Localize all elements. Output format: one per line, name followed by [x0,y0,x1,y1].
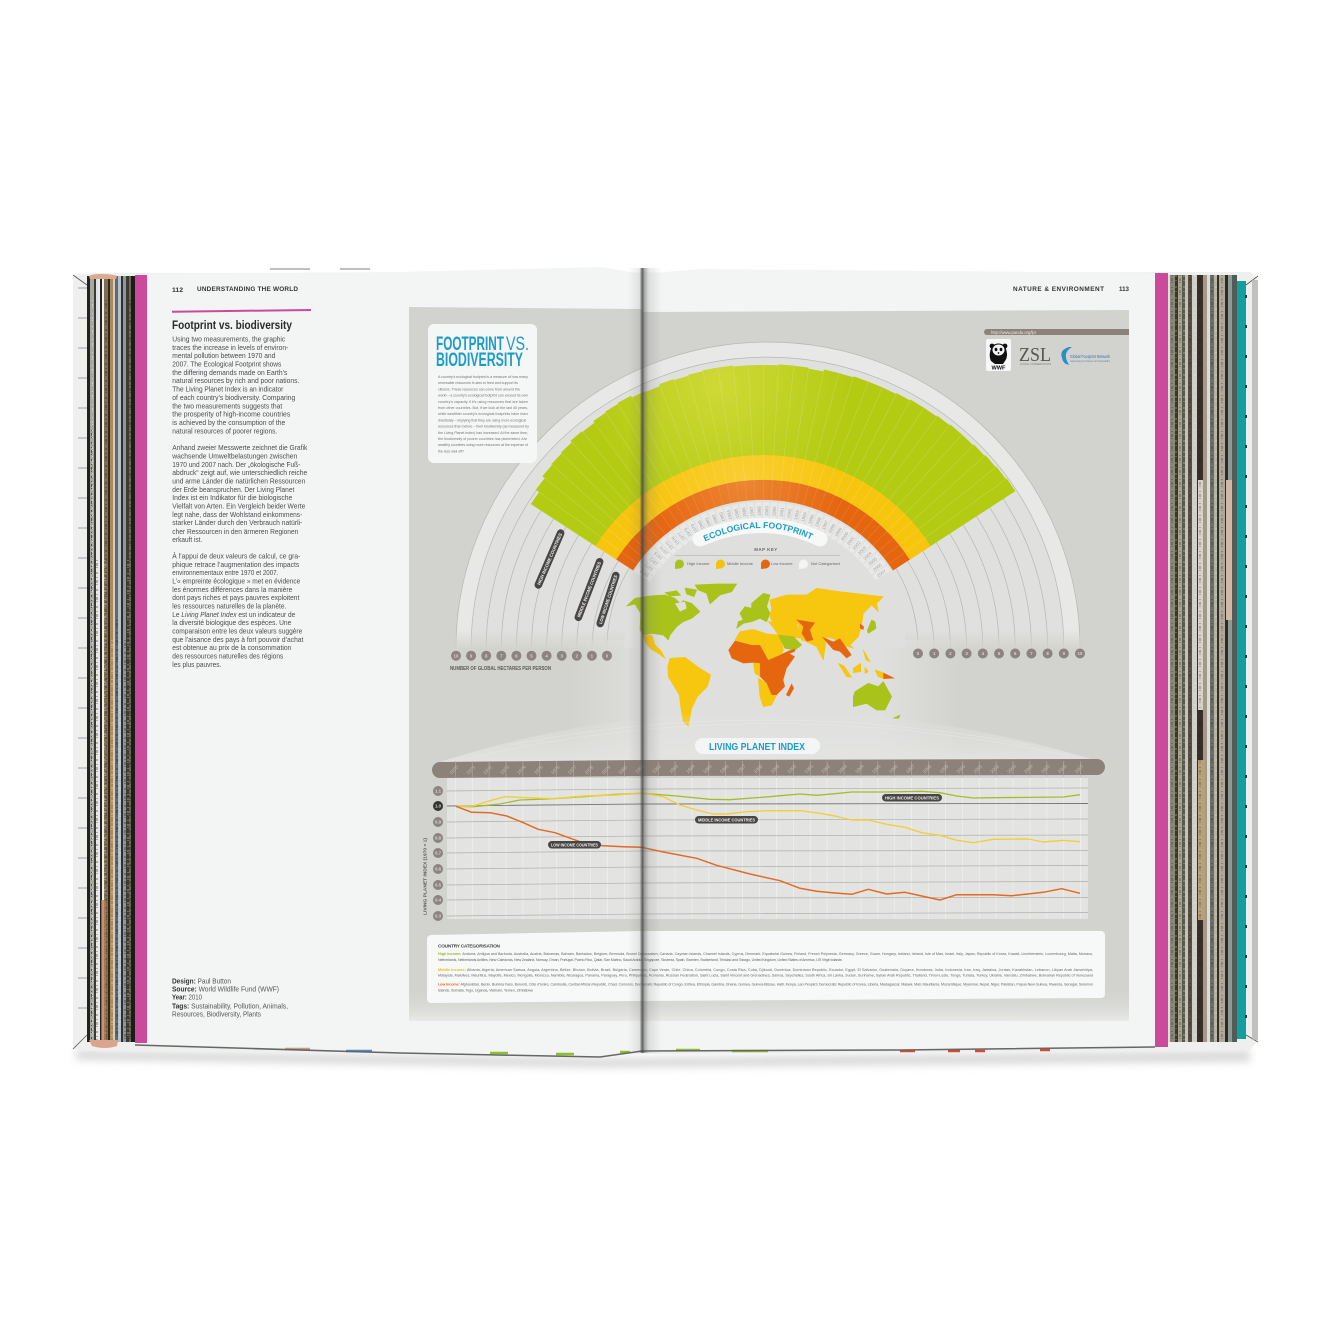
English text block: Using two measurements, the graphic [172,334,286,344]
left page running head: UNDERSTANDING THE WORLD [197,286,298,293]
year bar: 1998 [922,763,933,774]
year ring: 2007 [876,568,888,578]
label: middle income line: MIDDLE INCOME COUNTRIES [698,818,755,822]
heading: living planet index: LIVING PLANET INDEX [709,742,805,753]
year bar: 1984 [685,763,696,774]
left page running head [172,286,298,294]
year bar: 1974 [516,764,527,775]
main title: FOOTPRINT [436,334,504,355]
intro text: world – a country’s ecological footprint can exceed its own [438,394,528,398]
scale dots left [451,651,612,661]
logo: Global Footprint Network: Global Footprint Network [1070,354,1111,359]
year bar: 1971 [465,764,477,775]
year ring: 1974 [658,545,669,556]
year ring: 2004 [862,550,873,561]
scale dots left: 6 [515,653,518,658]
year ring: 1976 [670,535,680,546]
French text block [172,552,303,669]
year bar: 2007 [1074,763,1085,774]
year ring: 1983 [718,511,726,522]
label: low income line: LOW INCOME COUNTRIES [551,842,598,848]
year bar: 1972 [482,764,493,775]
year ring: 1981 [704,516,712,527]
logo: Global Footprint Network: Advancing the Science of Sustainability [1070,359,1111,363]
panel heading: COUNTRY CATEGORISATION [438,944,501,950]
key: low income: Low Income [771,561,793,566]
English text block: of each country’s biodiversity. Comparing [172,393,295,402]
scale dots right: 3 [965,651,968,656]
chart: living planet index [422,763,1097,921]
intro text: while wealthier country’s ecological footprints have risen [438,412,528,416]
label: middle income countries: MIDDLE INCOME COUNTRIES [576,561,602,618]
middle income list: Malaysia, Maldives, Mauritius, Mayotte, Mexico, Mongolia, Morocco, Namibia, Nicaragua, Panama, Paraguay, Peru, Philippines, Romania, Russian Federation, Saint Lucia, Saint Vincent and Grenadines, Samoa, Seychelles, South Africa, Sri Lanka, Sudan, Suriname, Syrian Arab Republic, Thailand, Timor-Leste, Tonga, Tunisia, Turkey, Ukraine, Vanuatu, Zimbabwe, Bolivarian Republic of Venezuela [438,974,1094,978]
axis dots [433,786,443,921]
intro text: the biodiversity of poorer countries has plummeted. Are [438,437,527,441]
low income band [625,490,901,565]
map: middle income regions [643,588,883,727]
axis dots: 0.6 [435,867,442,872]
scale caption: NUMBER OF GLOBAL HECTARES PER PERSON [450,666,551,672]
French text block: environnementaux entre 1970 et 2007. [172,568,278,577]
French text block: L’« empreinte écologique » met en évidence [172,576,300,586]
pink title rule [172,310,311,312]
year ring: 1992 [786,508,793,519]
English text block [172,334,299,436]
high income list [438,952,1093,962]
credits block: Resources, Biodiversity, Plants [172,1012,262,1018]
year bar: 1993 [837,763,848,774]
scale dots left: 0 [606,653,609,658]
axis title: LIVING PLANET INDEX (1970 = 1) [422,838,428,915]
panel: country categorisation [431,935,1101,999]
French text block: que l’aisance des pays à fort pouvoir d’achat [172,635,303,644]
German text block: Index ist ein Indikator für die biologische [172,493,292,502]
scale dots left: 3 [560,653,563,658]
intro text: country’s capacity if it’s using resources that are taken [438,400,528,404]
year bar: 1979 [601,764,612,775]
map key: MAP KEY [754,547,778,552]
map: hudson bay [675,602,687,612]
map: high income regions [627,584,900,718]
heading: ecological footprint [692,518,828,546]
year bar: 1978 [584,764,595,775]
year ring: 1975 [664,540,675,551]
credits block: Source: World Wildlife Fund (WWF) [172,986,279,994]
scale dots right: 1 [933,651,936,656]
scale dots right: 7 [1030,651,1033,656]
year ring: 1988 [757,506,762,516]
label: low income line [548,841,601,848]
logo: WWF [986,339,1011,372]
peach head and tail bands [89,274,118,1048]
English text block: natural resources by rich and poor nations. [172,376,299,385]
year ring [638,506,888,578]
scale dots right: 9 [1063,651,1066,656]
year bar: 1985 [702,763,713,774]
English text block: is achieved by the consumption of the [172,418,285,427]
main title: VS. [506,334,529,355]
year bar: 1975 [533,764,544,775]
year ring: 1984 [726,509,733,520]
year bar: 1987 [736,763,747,774]
low income list [438,982,1093,992]
year bar: 1973 [499,764,510,775]
intro text: the Living Planet Index) has increased. At the same time, [438,431,528,435]
English text block: traces the increase in levels of environ- [172,343,289,352]
year ring: 1979 [689,522,699,534]
scale dots left: 2 [576,653,579,658]
panel: title box [428,324,537,463]
German text block: cher Ressourcen in den ärmeren Regionen [172,527,298,536]
French text block: est obtenue au prix de la consommation [172,643,291,652]
year ring: 1995 [807,513,815,525]
middle income list: Middle Income: Albania, Algeria, American Samoa, Angola, Argentina, Belize, Bhutan, Bolivia, Brazil, Bulgaria, Cameroon, Cape Verde, Chile, China, Colombia, Congo, Costa Rica, Cuba, Djibouti, Dominica, Dominican Republic, Ecuador, Egypt, El Salvador, Guatemala, Guyana, Honduras, India, Indonesia, Iran, Iraq, Jamaica, Jordan, Kazakhstan, Lebanon, Libyan Arab Jamahiriya, [438,968,1093,972]
middle income list [438,968,1094,978]
intro text: resources than before – their biodiversity (as measured by [438,425,529,429]
German text block: Anhand zweier Messwerte zeichnet die Grafik [172,443,308,452]
year ring: 1973 [653,550,664,561]
German text block: der Erde beanspruchen. Der Living Planet [172,485,294,494]
intro text: drastically – implying that they are using more ecological [438,418,526,422]
scale dots right: 5 [998,651,1001,656]
French text block: Le Living Planet Index est un indicateur de [172,610,295,619]
intro text: citizens. These resources can come from around the [438,387,520,391]
middle income band [606,467,920,553]
year bar: 1981 [634,763,646,774]
year ring: 1993 [793,509,800,520]
book cover board [73,272,1258,1054]
scale dots right: 4 [982,651,985,656]
line: high income [456,791,1080,807]
head and tail edge colour marks [135,269,1155,1057]
year bar: 1994 [854,763,865,774]
scale dots left: 1 [591,653,594,658]
year ring: 1970 [638,568,650,578]
credits block: Tags: Sustainability, Pollution, Animals, [172,1004,288,1010]
French text block: des ressources naturelles des régions [172,652,284,660]
English text block: mental pollution between 1970 and [172,351,275,360]
credits block: Design: Paul Button [172,978,231,986]
year bar: 1991 [803,763,815,774]
key: middle income: Middle Income [727,561,754,566]
teal section edge with tabs [1237,281,1246,1039]
key: low income [761,560,793,569]
axis dots: 1.1 [435,789,442,794]
year bar: 1980 [618,764,629,775]
English text block: the two measurements suggests that [172,402,282,410]
right pink section strip [1155,273,1168,1047]
year ring: 1989 [764,506,769,516]
year ring: 1987 [749,506,755,517]
year bar: 1970 [449,764,460,775]
page spread [135,267,1155,1056]
English text block: the prosperity of high-income countries [172,410,291,418]
French text block: la diversité biologique des espèces. Une [172,618,291,627]
high income band [520,360,1020,560]
logo: ZSL: ZSL [1019,344,1051,366]
credits block: Year: 2010 [172,994,202,1002]
year ring: 1986 [741,507,747,517]
German text block: 1970 und 2007 nach. Der „ökologische Fuß- [172,460,301,469]
year ring: 1999 [834,526,843,538]
axis dots: 0.7 [435,851,442,856]
light area behind world map [570,640,960,765]
main title: BIODIVERSITY [436,350,523,371]
year bar: 2004 [1023,763,1034,774]
light fan above the index chart [440,710,1095,762]
year bar [440,763,1097,775]
German text block: wachsende Umweltbelastungen zwischen [171,452,297,460]
line: middle income [456,793,1080,843]
scale dots left: 8 [485,653,488,658]
French text block: dont pays riches et pays pauvres exploitent [172,593,299,602]
year bar: 1999 [939,763,950,774]
year ring: 1980 [696,519,705,531]
French text block: phique retrace l’augmentation des impacts [172,560,300,569]
year ring: 1982 [711,513,719,525]
German text block: abdruck“ zeigt auf, wie unterschiedlich reiche [172,468,307,477]
axis dots: 0.4 [435,898,442,903]
scale dots left: 10 [454,653,459,658]
year bar: 1982 [651,763,662,774]
key: not categorised: Not Categorised [811,561,840,566]
intro text: from other countries. But, if we look at the last 40 years, [438,406,528,410]
year ring: 2005 [867,556,878,567]
world map [627,584,900,727]
year ring: 2003 [857,545,868,556]
logo: WWF: WWF [992,366,1006,372]
concentric hectare arcs [450,342,1090,650]
scale dots right [913,648,1085,658]
intro text: A country’s ecological footprint is a measure of how many [438,375,528,379]
grid rows [447,788,1088,916]
scale dots right: 2 [949,651,952,656]
left page running head: 112 [172,287,183,294]
year ring: 1990 [771,506,777,517]
label: high income line [882,794,942,802]
English text block: natural resources of poorer regions. [172,426,277,436]
year ring: 1977 [676,530,686,542]
English text block: The Living Planet Index is an indicator [172,384,284,394]
year ring: 2002 [851,540,862,551]
book gutter shadow [628,268,662,1053]
German text block: starker Länder durch den Verbrauch natürli- [172,518,303,527]
low income list: Islands, Somalia, Togo, Uganda, Vietnam, Yemen, Zimbabwe [438,988,533,992]
credits block [172,978,288,1018]
year bar: 1983 [668,763,679,774]
year bar: 1977 [567,764,578,775]
German text block: erkauft ist. [172,535,202,544]
year ring: 2006 [872,562,883,572]
map: low income regions [728,619,895,697]
year bar: 1992 [820,763,831,774]
axis dots: 0.8 [435,836,442,841]
logo: ZSL: LIVING CONSERVATION [1020,362,1051,366]
year bar: 1996 [888,763,899,774]
book drop shadow [76,1050,1250,1068]
year ring: 1997 [821,519,830,531]
left page edges: stacked pages [87,275,135,1042]
year ring: 2001 [846,535,856,546]
German text block [171,443,308,544]
year bar: 2000 [956,763,967,774]
right page edges: stacked pages [1168,275,1237,1042]
French text block: les ressources naturelles de la planète. [172,602,286,610]
axis dots: 0.9 [435,820,442,825]
scale dots left: 5 [530,653,533,658]
label: low income countries: LOW INCOME COUNTRIES [598,575,618,625]
year ring: 1996 [814,516,822,527]
high income list: Netherlands, Netherlands Antilles, New Caledonia, New Zealand, Norway, Oman, Portugal, Puerto Rico, Qatar, San Marino, Saudi Arabia, Singapore, Slovenia, Spain, Sweden, Switzerland, Trinidad and Tobago, United Kingdom, United States of America, US Virgin Islands [438,958,842,962]
axis dots: 1.0 [435,804,442,809]
year bar: 1989 [770,763,781,774]
intro text: the less well off? [438,449,464,453]
key: high income [675,560,710,569]
article title: Footprint vs. biodiversity [172,318,292,332]
year ring: 1972 [648,556,659,567]
source URL bar [984,329,1129,335]
year bar: 2006 [1057,763,1068,774]
year bar: 2005 [1040,763,1051,774]
year ring: 2000 [840,530,850,542]
high income list: High Income: Andorra, Antigua and Barbuda, Australia, Austria, Bahamas, Bahrain, Barbados, Belgium, Bermuda, Brunei Darussalam, Canada, Cayman Islands, Channel Islands, Cyprus, Denmark, Equatorial Guinea, Finland, French Polynesia, Germany, Greece, Guam, Hungary, Iceland, Ireland, Isle of Man, Israel, Italy, Japan, Republic of Korea, Kuwait, Liechtenstein, Luxembourg, Malta, Monaco, [438,952,1093,956]
scale dots right: 8 [1046,651,1049,656]
left pink section strip [135,275,147,1043]
year bar: 2003 [1006,763,1017,774]
scale dots left: 4 [545,653,548,658]
year bar: 1976 [550,764,561,775]
right page running head: NATURE & ENVIRONMENT [1013,286,1104,293]
year ring: 1998 [827,522,837,534]
line: low income [456,806,1080,900]
German text block: legt nahe, dass der Wohlstand einkommens- [172,510,303,519]
year ring: 1991 [779,507,785,517]
axis dots: 0.3 [435,914,442,919]
German text block: Vielfalt von Arten. Ein Vergleich beider Werte [172,502,305,510]
scale dots right: 6 [1014,651,1017,656]
year ring: 1971 [643,562,654,572]
label: middle income line [695,816,758,824]
year ring: 1985 [733,508,740,519]
English text block: the differing demands made on Earth’s [172,368,288,377]
year bar: 1990 [787,763,798,774]
source URL bar: http://www.panda.org/lpr [991,330,1037,335]
logo: Global Footprint Network [1061,347,1111,365]
scale dots right: 0 [917,651,920,656]
French text block: comparaison entre les deux valeurs suggère [172,626,302,636]
year bar: 2002 [989,763,1000,774]
main title [436,334,529,371]
year bar: 2001 [972,763,984,774]
label: high income line: HIGH INCOME COUNTRIES [885,796,939,800]
key: not categorised [799,560,840,569]
chart: ecological footprint fan [520,360,1020,578]
intro text [438,375,529,453]
year bar: 1997 [905,763,916,774]
heading: ecological footprint: ECOLOGICAL FOOTPRINT [703,522,814,542]
year bar: 1986 [719,763,730,774]
key: middle income [716,560,754,569]
axis dots: 0.5 [435,883,442,888]
right page running head: 113 [1119,286,1129,293]
year ring: 1994 [800,511,808,522]
French text block: les plus pauvres. [172,660,221,669]
map key [675,547,840,569]
plot background [447,778,1088,919]
panel: infographic background [409,307,1129,1021]
year bar: 1988 [753,763,764,774]
French text block: les énormes différences dans la manière [172,585,292,594]
French text block: À l’appui de deux valeurs de calcul, ce gra- [172,552,301,560]
German text block: und arme Länder die natürlichen Ressourcen [172,476,305,486]
key: high income: High Income [687,561,710,566]
intro text: renewable resources it uses to feed and support its [438,381,518,385]
year bar: 1995 [871,763,882,774]
label: high income countries: HIGH INCOME COUNTRIES [536,532,563,586]
scale dots right: 10 [1078,651,1083,656]
low income list: Low Income: Afghanistan, Benin, Burkina Faso, Burundi, Côte d’Ivoire, Cambodia, Central African Republic, Chad, Comoros, Democratic Republic of Congo, Eritrea, Ethiopia, Gambia, Ghana, Guinea, Guinea-Bissau, Haiti, Kenya, Lao People’s Democratic Republic of Korea, Liberia, Madagascar, Malawi, Mali, Mauritania, Mozambique, Myanmar, Nepal, Niger, Pakistan, Papua New Guinea, Rwanda, Senegal, Solomon [438,982,1093,986]
scale dots left: 9 [470,653,473,658]
English text block: 2007. The Ecological Footprint shows [172,360,282,368]
year ring: 1978 [683,526,692,538]
scale dots left: 7 [500,653,503,658]
bottom lighter band of panel [409,985,1129,1021]
intro text: wealthy countries using more resources at the expense of [438,443,529,447]
